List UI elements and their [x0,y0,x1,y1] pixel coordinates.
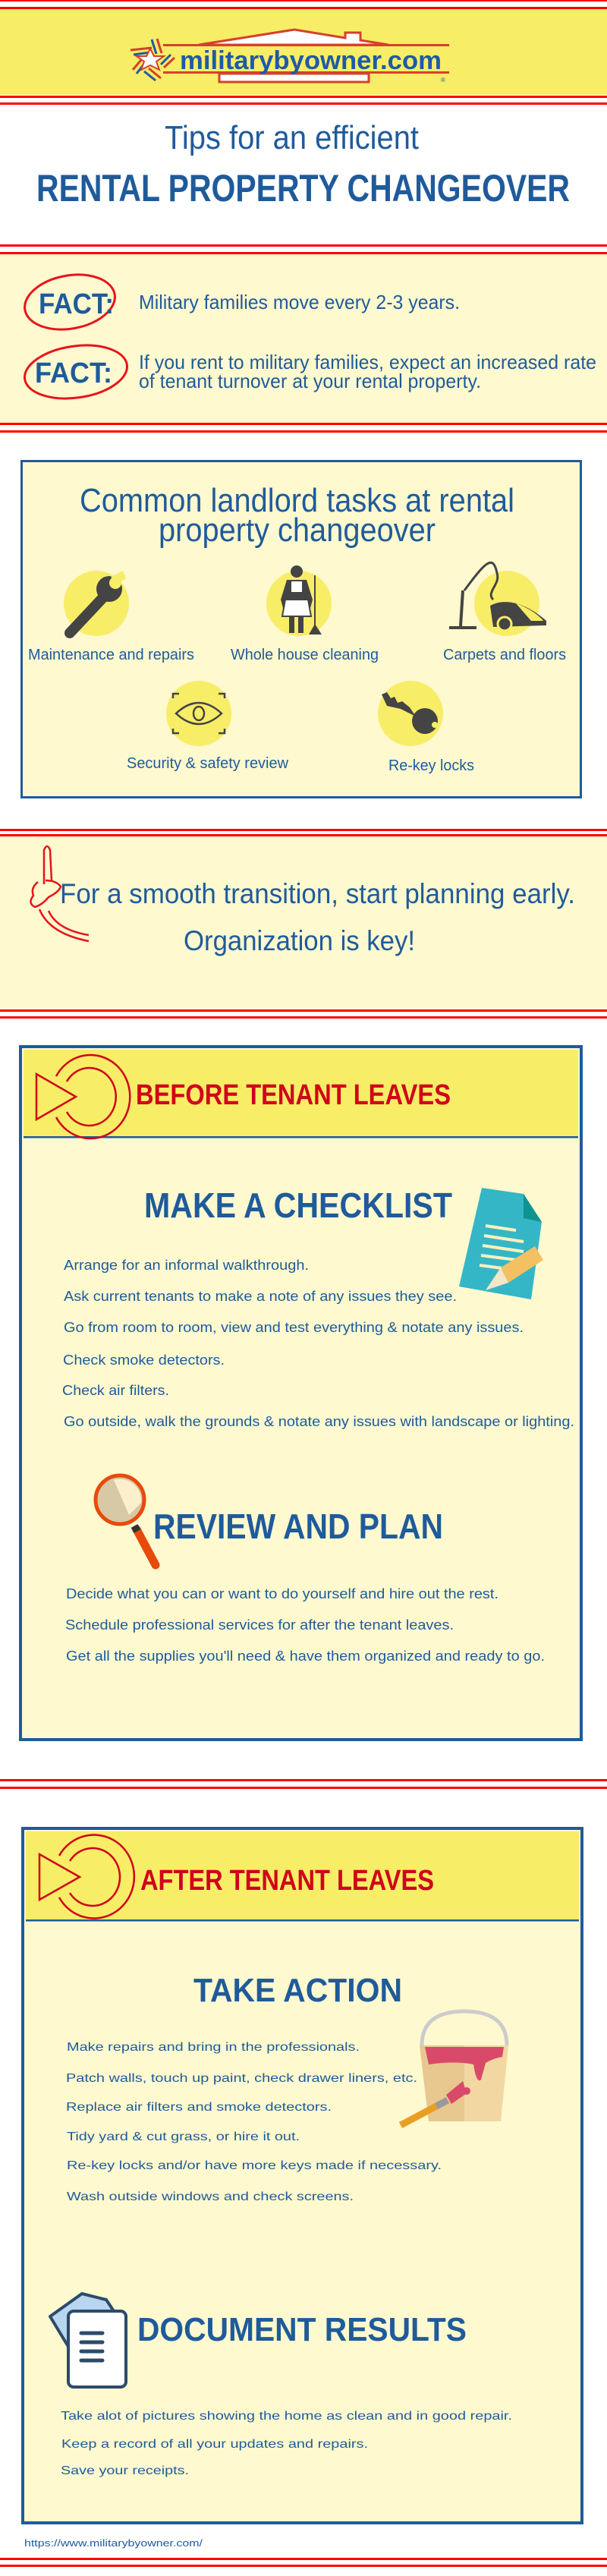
header: BEFORE TENANT LEAVES [136,1079,451,1111]
icon: key [378,681,443,746]
panel: facts [0,244,607,433]
logo: militarybyowner.com [180,46,442,75]
title: Tips for an efficient [165,119,419,156]
icon: pointing hand [30,846,89,941]
text: For a smooth transition, start planning early. [60,878,575,909]
header [26,1831,579,1922]
panel: after tenant leaves [23,1828,582,2523]
heading: make a checklist: MAKE A CHECKLIST [144,1186,452,1225]
text [60,878,575,956]
logo: ® [441,77,445,83]
list: review items: Decide what you can or want to do yourself and hire out the rest. [66,1586,498,1601]
fact 2 [21,339,596,405]
list: checklist items: Check air filters. [62,1383,169,1398]
fact 2: FACT: [35,357,112,389]
icon: magnifier [96,1475,156,1565]
label: carpets: Carpets and floors [443,647,566,663]
list: action items: Make repairs and bring in the professionals. [67,2041,360,2054]
list: checklist items: Ask current tenants to make a note of any issues they see. [64,1289,457,1304]
list: action items [66,2041,442,2203]
list: action items: Patch walls, touch up paint, check drawer liners, etc. [66,2072,417,2085]
icon: vacuum [449,562,546,636]
list: checklist items: Go from room to room, view and test everything & notate any issues. [64,1320,524,1335]
icon: play circle [36,1055,130,1138]
heading: document results: DOCUMENT RESULTS [137,2311,467,2348]
heading: take action: TAKE ACTION [193,1972,402,2009]
fact 1: Military families move every 2-3 years. [139,291,460,313]
title [36,119,570,209]
label: re-key: Re-key locks [388,757,474,774]
header band [0,0,607,105]
heading: review and plan: REVIEW AND PLAN [153,1507,443,1546]
text: Organization is key! [184,925,415,956]
icon: documents [50,2294,126,2387]
label: cleaning: Whole house cleaning [231,647,379,663]
icon: eye [166,681,231,746]
panel: before tenant leaves [20,1047,581,1740]
fact 2: of tenant turnover at your rental property. [139,370,481,392]
fact 1: FACT: [39,288,114,320]
list: checklist items: Check smoke detectors. [63,1353,225,1368]
list: document items: Save your receipts. [61,2464,189,2477]
header [24,1050,578,1138]
footer url: https://www.militarybyowner.com/ [24,2537,203,2549]
heading [80,482,514,549]
header: AFTER TENANT LEAVES [140,1865,434,1897]
label: maintenance: Maintenance and repairs [28,647,194,663]
panel: common landlord tasks [21,461,581,797]
fact 2: If you rent to military families, expect an increased rate [139,351,596,373]
list: review items [65,1586,545,1664]
heading: property changeover [159,512,436,549]
list: document items: Take alot of pictures showing the home as clean and in good repair. [61,2410,512,2423]
list: action items: Replace air filters and smoke detectors. [66,2101,332,2114]
list: checklist items: Go outside, walk the grounds & notate any issues with landscape or lighting. [64,1414,574,1429]
list: checklist items [62,1258,574,1429]
list: action items: Tidy yard & cut grass, or hire it out. [67,2130,300,2143]
list: action items: Wash outside windows and check screens. [67,2190,354,2203]
heading: Common landlord tasks at rental [80,482,514,519]
icon: play circle [39,1835,134,1919]
icon: cleaning person [266,565,332,636]
fact 1 [20,268,460,336]
icon: wrench [64,571,129,636]
list: review items: Schedule professional services for after the tenant leaves. [65,1617,454,1633]
label: security: Security & safety review [127,755,289,772]
list: action items: Re-key locks and/or have more keys made if necessary. [67,2159,442,2172]
list: checklist items: Arrange for an informal walkthrough. [64,1258,309,1273]
icon: document with pencil [459,1188,543,1299]
logo [131,30,449,83]
list: document items [61,2410,512,2477]
icon: paint bucket [401,2011,508,2125]
panel: plan early callout [0,829,607,1019]
list: review items: Get all the supplies you'll need & have them organized and ready to go. [66,1649,545,1664]
list: document items: Keep a record of all your updates and repairs. [61,2438,368,2451]
